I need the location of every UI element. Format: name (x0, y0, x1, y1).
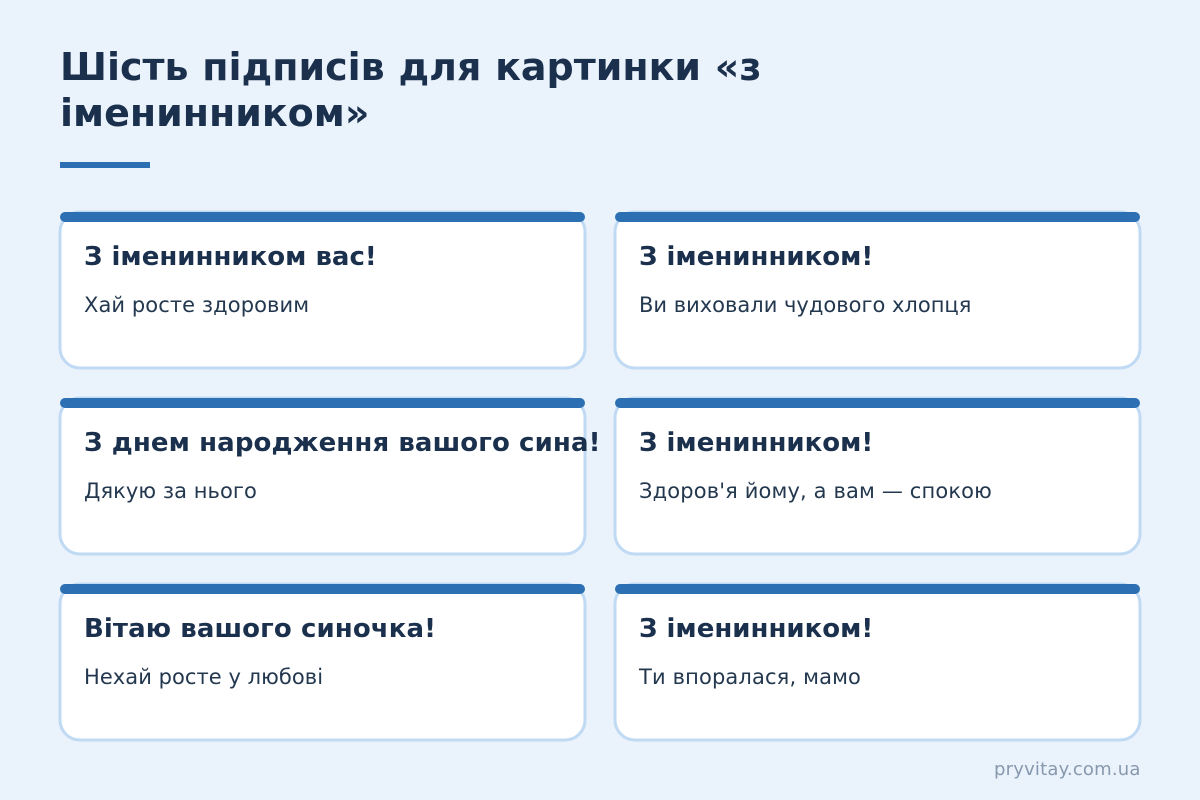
panel: card 2: З іменинником! (639, 242, 873, 272)
panel: card 1 (58, 210, 586, 370)
panel: card 2 (614, 210, 1142, 370)
panel: card 4 (614, 396, 1142, 556)
title: Шість підписів для картинки «з (60, 45, 761, 89)
panel: card 3: Дякую за нього (84, 479, 257, 503)
panel: card 3: З днем народження вашого сина! (84, 428, 601, 458)
panel: card 6 (614, 582, 1142, 742)
panel: card 6: З іменинником! (639, 614, 873, 644)
panel: card 5 (58, 582, 586, 742)
panel: card 6: Ти впоралася, мамо (639, 665, 861, 689)
footer source: pryvitay.com.ua (994, 759, 1141, 780)
title: іменинником» (60, 91, 369, 135)
panel: card 4: Здоров'я йому, а вам — спокою (639, 479, 992, 503)
panel: card 3 (58, 396, 601, 556)
panel: card 2: Ви виховали чудового хлопця (639, 293, 971, 317)
panel: card 4: З іменинником! (639, 428, 873, 458)
title accent bar (60, 162, 150, 168)
panel: card 5: Вітаю вашого синочка! (84, 614, 436, 644)
title (60, 45, 761, 135)
panel: card 1: З іменинником вас! (84, 242, 377, 272)
panel: card 1: Хай росте здоровим (84, 293, 309, 317)
panel: card 5: Нехай росте у любові (84, 665, 323, 689)
